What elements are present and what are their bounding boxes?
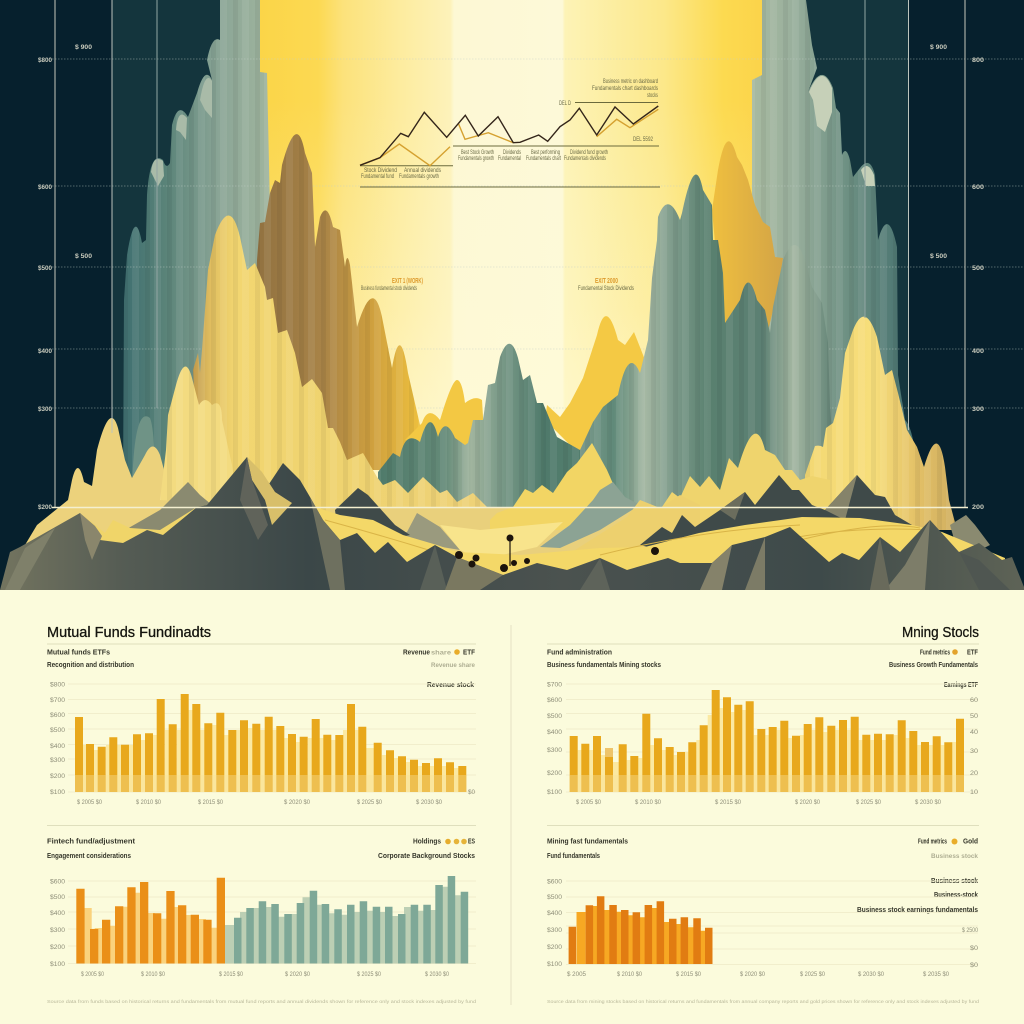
panel: mountain hero [0, 0, 1024, 590]
back teal ridge right [752, 0, 913, 470]
chart 1 x axis [77, 799, 442, 806]
valley callouts [361, 278, 634, 292]
chart 4 bars [569, 896, 712, 964]
chart 3 gridlines [68, 881, 476, 964]
chart 4 y axes: $200 [547, 944, 562, 951]
chart 4 y axes: $100 [547, 961, 562, 968]
chart 1 header: ETF [463, 650, 476, 656]
chart 4 y axes: $ 2500 [962, 927, 978, 934]
chart 4 x axis: $ 2005 [567, 971, 586, 978]
chart 2 y axes [547, 682, 978, 796]
chart 1 y axis: $0 [468, 789, 475, 796]
chart 4 header: Business stock [931, 853, 978, 860]
line chart annotations: Stock Dividend [364, 168, 397, 174]
chart 3 footnote: Source data from funds based on historical returns and fundamentals from mutual fund reports and annual dividends shown for reference only and stock indexes adjusted by fund [47, 999, 477, 1004]
panel: mining fundamentals chart [547, 838, 980, 1004]
right axis labels: 200 [972, 504, 984, 511]
chart 4 x axis [567, 971, 949, 978]
chart 1 x axis: $ 2005 $0 [77, 799, 102, 806]
left axis labels: $800 [38, 57, 52, 64]
chart 1 x axis: $ 2010 $0 [136, 799, 161, 806]
front rock range [0, 457, 1024, 590]
chart 4 y axes: $400 [547, 910, 562, 917]
chart 4 y axes: $500 [547, 894, 562, 901]
left axis labels [38, 44, 92, 511]
valley callouts: Fundamental Stock Dividends [578, 286, 634, 292]
chart 3 x axis: $ 2030 $0 [425, 971, 449, 978]
line chart annotations: Best Stock Growth [461, 150, 494, 156]
line chart annotations: Fundamentals chart [526, 156, 561, 162]
chart 1 gridlines [68, 684, 476, 792]
back teal ridge left [123, 0, 270, 490]
valley callouts: EXIT 2000 [595, 278, 618, 285]
chart 1 header [47, 649, 476, 689]
chart 2 x axis [576, 799, 941, 806]
panel: mutual funds chart [47, 649, 476, 806]
panel: fund fundamentals chart [47, 838, 477, 1004]
line chart annotations: Best performing [531, 150, 560, 156]
right axis labels: $ 500 [930, 253, 947, 260]
panel divider [510, 625, 512, 1005]
chart 2 y axes: 40 [970, 729, 978, 736]
right axis labels: 500 [972, 265, 984, 272]
yellow hump right of valley [575, 495, 700, 550]
chart 2 y axes: $500 [547, 713, 562, 720]
chart 2 header: Fund metrics [920, 650, 950, 656]
chart 4 x axis: $ 2025 $0 [800, 971, 825, 978]
chart 1 header: share [431, 650, 451, 656]
title: mining stocks: Mning Stocls [902, 624, 979, 641]
line chart annotations: stocks [647, 93, 658, 99]
right axis labels: 600 [972, 184, 984, 191]
chart 3 x axis: $ 2010 $0 [141, 971, 165, 978]
chart 2 y axes: $400 [547, 729, 562, 736]
line chart annotations: Fundamentals chart dashboards [592, 86, 658, 92]
valley callouts: EXIT 1 (WORK) [392, 278, 423, 285]
chart 3 y axis: $400 [50, 910, 65, 917]
chart 2 y axes: $100 [547, 789, 562, 796]
chart 3 x axis [81, 971, 449, 978]
chart 1 y axis: $600 [50, 712, 65, 719]
dark mid mountain left [335, 488, 410, 550]
grey peaks center [125, 482, 640, 550]
chart 2 y axes: $700 [547, 682, 562, 688]
chart 4 x axis: $ 2020 $0 [740, 971, 765, 978]
chart 2 x axis: $ 2005 $0 [576, 799, 601, 806]
chart 3 header [47, 838, 475, 860]
line chart annotations [361, 79, 658, 180]
gold peak left [250, 134, 430, 470]
chart 4 y axes: $300 [547, 927, 562, 934]
chart 2 header: ETF [967, 650, 979, 656]
chart 1 header: Recognition and distribution [47, 662, 134, 669]
pale peak tips left [151, 78, 212, 186]
line chart annotations: Dividends [503, 150, 521, 156]
chart 4 header: Mining fast fundamentals [547, 838, 628, 846]
dark mid mountains right [640, 475, 912, 550]
chart 4 x axis: $ 2035 $0 [923, 971, 949, 978]
black drop markers [455, 534, 659, 572]
right axis labels [930, 44, 984, 511]
chart 4 y axes: $0 [970, 962, 978, 969]
tall yellow mountain right [805, 317, 957, 530]
glowing golden sky [260, 0, 764, 520]
chart 3 header: Corporate Background Stocks [378, 853, 475, 860]
left axis labels: $500 [38, 265, 52, 272]
right axis labels: 300 [972, 406, 984, 413]
chart 3 y axis: $300 [50, 927, 65, 934]
right axis labels: $ 900 [930, 44, 947, 51]
left axis labels: $ 500 [75, 253, 92, 260]
line chart [360, 79, 660, 187]
dotted value guides [52, 59, 1024, 408]
chart 2 y axes: 20 [970, 770, 978, 777]
chart 2 x axis: $ 2010 $0 [635, 799, 661, 806]
panel: mining stocks chart [547, 649, 979, 806]
side dusk columns [112, 0, 908, 480]
chart 1 y axis: $100 [50, 789, 65, 796]
chart 2 y axes: 10 [970, 789, 978, 796]
left axis labels: $400 [38, 348, 52, 355]
chart 1 header: Mutual funds ETFs [47, 650, 110, 656]
gold peak right [712, 141, 783, 335]
right teal mountains [580, 174, 840, 530]
night sky [0, 0, 1024, 590]
line chart annotations: Business metric on dashboard [603, 79, 658, 85]
chart 4 x axis: $ 2010 $0 [617, 971, 642, 978]
left axis labels: $300 [38, 406, 52, 413]
chart 1 y axis: $300 [50, 757, 65, 764]
line chart annotations: Fundamental [498, 156, 521, 162]
line chart annotations: Fundamentals growth [458, 156, 494, 162]
chart 2 bars [570, 690, 964, 792]
chart 4 y axes [547, 878, 978, 969]
chart 3 orange bars [76, 878, 225, 964]
chart 2 y axes: 60 [970, 697, 978, 704]
chart 2 x axis: $ 2015 $0 [715, 799, 741, 806]
center yellow hills [405, 316, 645, 455]
chart 1 x axis: $ 2030 $0 [416, 799, 442, 806]
chart 4 header [547, 838, 978, 914]
right rock shoulder [950, 515, 990, 560]
title: mutual funds: Mutual Funds Fundinadts [47, 624, 211, 641]
chart 2 header: Business Growth Fundamentals [889, 662, 978, 669]
chart 1 y axis: $500 [50, 727, 65, 734]
valley callouts: Business fundamental stock dividends [361, 286, 417, 292]
chart 1 bars [75, 694, 466, 792]
chart 1 header: Revenue [403, 650, 430, 656]
chart 4 header: Business stock earnings fundamentals [857, 907, 978, 914]
pale peak tips right [809, 76, 875, 186]
chart 3 x axis: $ 2025 $0 [357, 971, 381, 978]
line chart annotations: Fundamentals dividends [564, 156, 606, 162]
line chart annotations: Fundamental fund [361, 174, 394, 180]
line chart annotations: Fundamentals growth [399, 174, 439, 180]
small teal peak [132, 416, 155, 490]
yellow sand band center and right [315, 507, 1005, 580]
chart 2 x axis: $ 2030 $0 [915, 799, 941, 806]
chart 3 header: Holdings [413, 838, 441, 846]
chart 1 x axis: $ 2015 $0 [198, 799, 223, 806]
chart 2 x axis: $ 2025 $0 [856, 799, 881, 806]
chart 3 y axis: $100 [50, 961, 65, 968]
chart 1 header: Revenue stock [427, 682, 474, 689]
chart 3 header: Fintech fund/adjustment [47, 838, 136, 846]
chart 3 header: ES [468, 838, 475, 846]
pale valley floor [440, 522, 563, 560]
chart 3 x axis: $ 2015 $0 [219, 971, 243, 978]
chart 3 y axis: $600 [50, 878, 65, 886]
chart 4 x axis: $ 2015 $0 [676, 971, 701, 978]
chart 3 x axis: $ 2020 $0 [285, 971, 310, 978]
chart 1 y axis [50, 682, 475, 796]
chart 4 header: Fund fundamentals [547, 853, 600, 860]
chart 3 x axis: $ 2005 $0 [81, 971, 104, 978]
section rules [47, 644, 979, 826]
chart 2 header: Business fundamentals Mining stocks [547, 662, 661, 669]
chart 4 x axis: $ 2030 $0 [858, 971, 884, 978]
yellow sand band left [80, 505, 207, 545]
chart 4 header: Business stock [931, 878, 978, 885]
chart 4 gridlines [566, 881, 978, 964]
chart 2 header [547, 649, 979, 689]
chart 4 y axes: $600 [547, 878, 562, 886]
chart 2 x axis: $ 2020 $0 [795, 799, 820, 806]
left axis labels: $ 900 [75, 44, 92, 51]
chart 1 x axis: $ 2025 $0 [357, 799, 382, 806]
chart 3 y axis: $500 [50, 894, 65, 901]
chart 1 header: Revenue share [431, 662, 475, 669]
chart 2 header: Fund administration [547, 650, 612, 656]
chart 4 y axes: $0 [970, 945, 978, 952]
chart 2 gridlines [566, 684, 978, 792]
chart 2 y axes: 50 [970, 713, 978, 720]
line chart annotations: Annual dividends [404, 168, 441, 174]
left axis labels: $200 [38, 504, 52, 511]
chart 1 y axis: $700 [50, 697, 65, 704]
axis grid lines [52, 0, 968, 508]
line chart annotations: Dividend fund growth [570, 150, 608, 156]
chart 4 header: Fund metrics [918, 838, 947, 846]
line chart annotations: DEL D [559, 101, 571, 107]
chart 2 y axes: $200 [547, 770, 562, 777]
chart 1 y axis: $200 [50, 773, 65, 780]
left axis labels: $600 [38, 184, 52, 191]
chart 1 y axis: $800 [50, 682, 65, 688]
chart 2 y axes: $300 [547, 747, 562, 754]
chart 3 y axis: $200 [50, 944, 65, 951]
center teal mountain [378, 344, 600, 530]
chart 4 header: Gold [963, 838, 978, 846]
chart 2 y axes: $600 [547, 697, 562, 704]
tall yellow mountain left [193, 215, 500, 540]
chart 1 y axis: $400 [50, 743, 65, 750]
chart 2 y axes: 30 [970, 748, 978, 755]
chart 1 x axis: $ 2020 $0 [284, 799, 310, 806]
line chart annotations: DEL 5592 [633, 137, 653, 143]
chart 3 header: Engagement considerations [47, 853, 131, 860]
valley foothills [330, 434, 830, 575]
chart 2 header: Earnings ETF [944, 682, 979, 689]
chart 3 y axis [50, 878, 65, 968]
right axis labels: 800 [972, 57, 984, 64]
front yellow peaks left [25, 367, 238, 545]
chart 4 header: Business-stock [934, 892, 978, 899]
chart 3 teal bars [225, 876, 468, 964]
chart 4 footnote: Source data from mining stocks based on historical returns and fundamentals from annual company reports and gold prices shown for reference only and stock indexes adjusted by fund [547, 999, 980, 1004]
right axis labels: 400 [972, 348, 984, 355]
